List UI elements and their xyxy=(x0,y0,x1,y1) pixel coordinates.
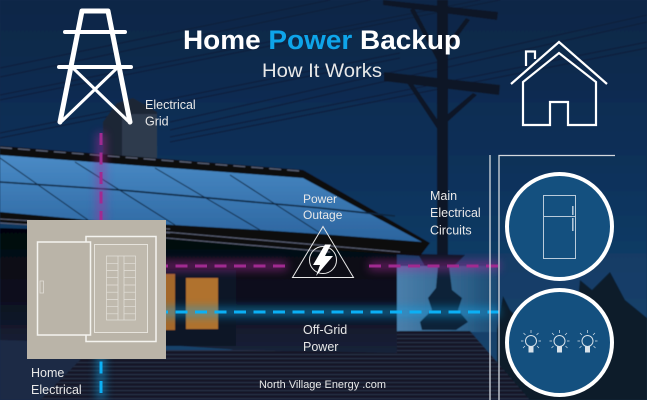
far gap of sky behind house xyxy=(397,266,497,332)
label: main electrical circuits: Main xyxy=(430,189,457,203)
solar panels xyxy=(0,155,422,242)
icon: house xyxy=(511,42,607,125)
icon: light bulbs xyxy=(521,330,598,352)
circuit bus lines xyxy=(490,155,615,400)
title: Home Power Backup xyxy=(183,25,461,55)
circuit: refrigerator xyxy=(507,174,612,279)
panel: home electrical box xyxy=(27,220,166,359)
label: power outage: Power xyxy=(303,192,337,206)
wall xyxy=(0,228,397,353)
chimney xyxy=(103,98,157,158)
label: electrical grid: Grid xyxy=(145,114,169,128)
icon: refrigerator xyxy=(544,196,576,258)
trees xyxy=(420,266,468,330)
label: off-grid power: Power xyxy=(303,340,338,354)
label: off-grid power: Off-Grid xyxy=(303,323,347,337)
label: electrical grid: Electrical xyxy=(145,98,196,112)
breaker grid xyxy=(106,256,136,320)
footer credit: North Village Energy .com xyxy=(259,379,386,391)
circuit: lighting xyxy=(507,290,612,395)
label: power outage: Outage xyxy=(303,208,343,222)
label: home electrical: Home xyxy=(31,366,64,380)
roof band xyxy=(0,146,430,256)
glow lines xyxy=(101,133,500,400)
label: main electrical circuits: Electrical xyxy=(430,206,481,220)
blue off-grid line xyxy=(101,312,500,400)
icon: transmission tower xyxy=(59,11,131,122)
label: main electrical circuits: Circuits xyxy=(430,224,472,238)
label: home electrical: Electrical xyxy=(31,383,82,397)
magenta grid line xyxy=(101,133,500,266)
lower roof xyxy=(0,331,530,400)
icon: power outage warning xyxy=(292,226,354,278)
subtitle: How It Works xyxy=(262,60,382,82)
